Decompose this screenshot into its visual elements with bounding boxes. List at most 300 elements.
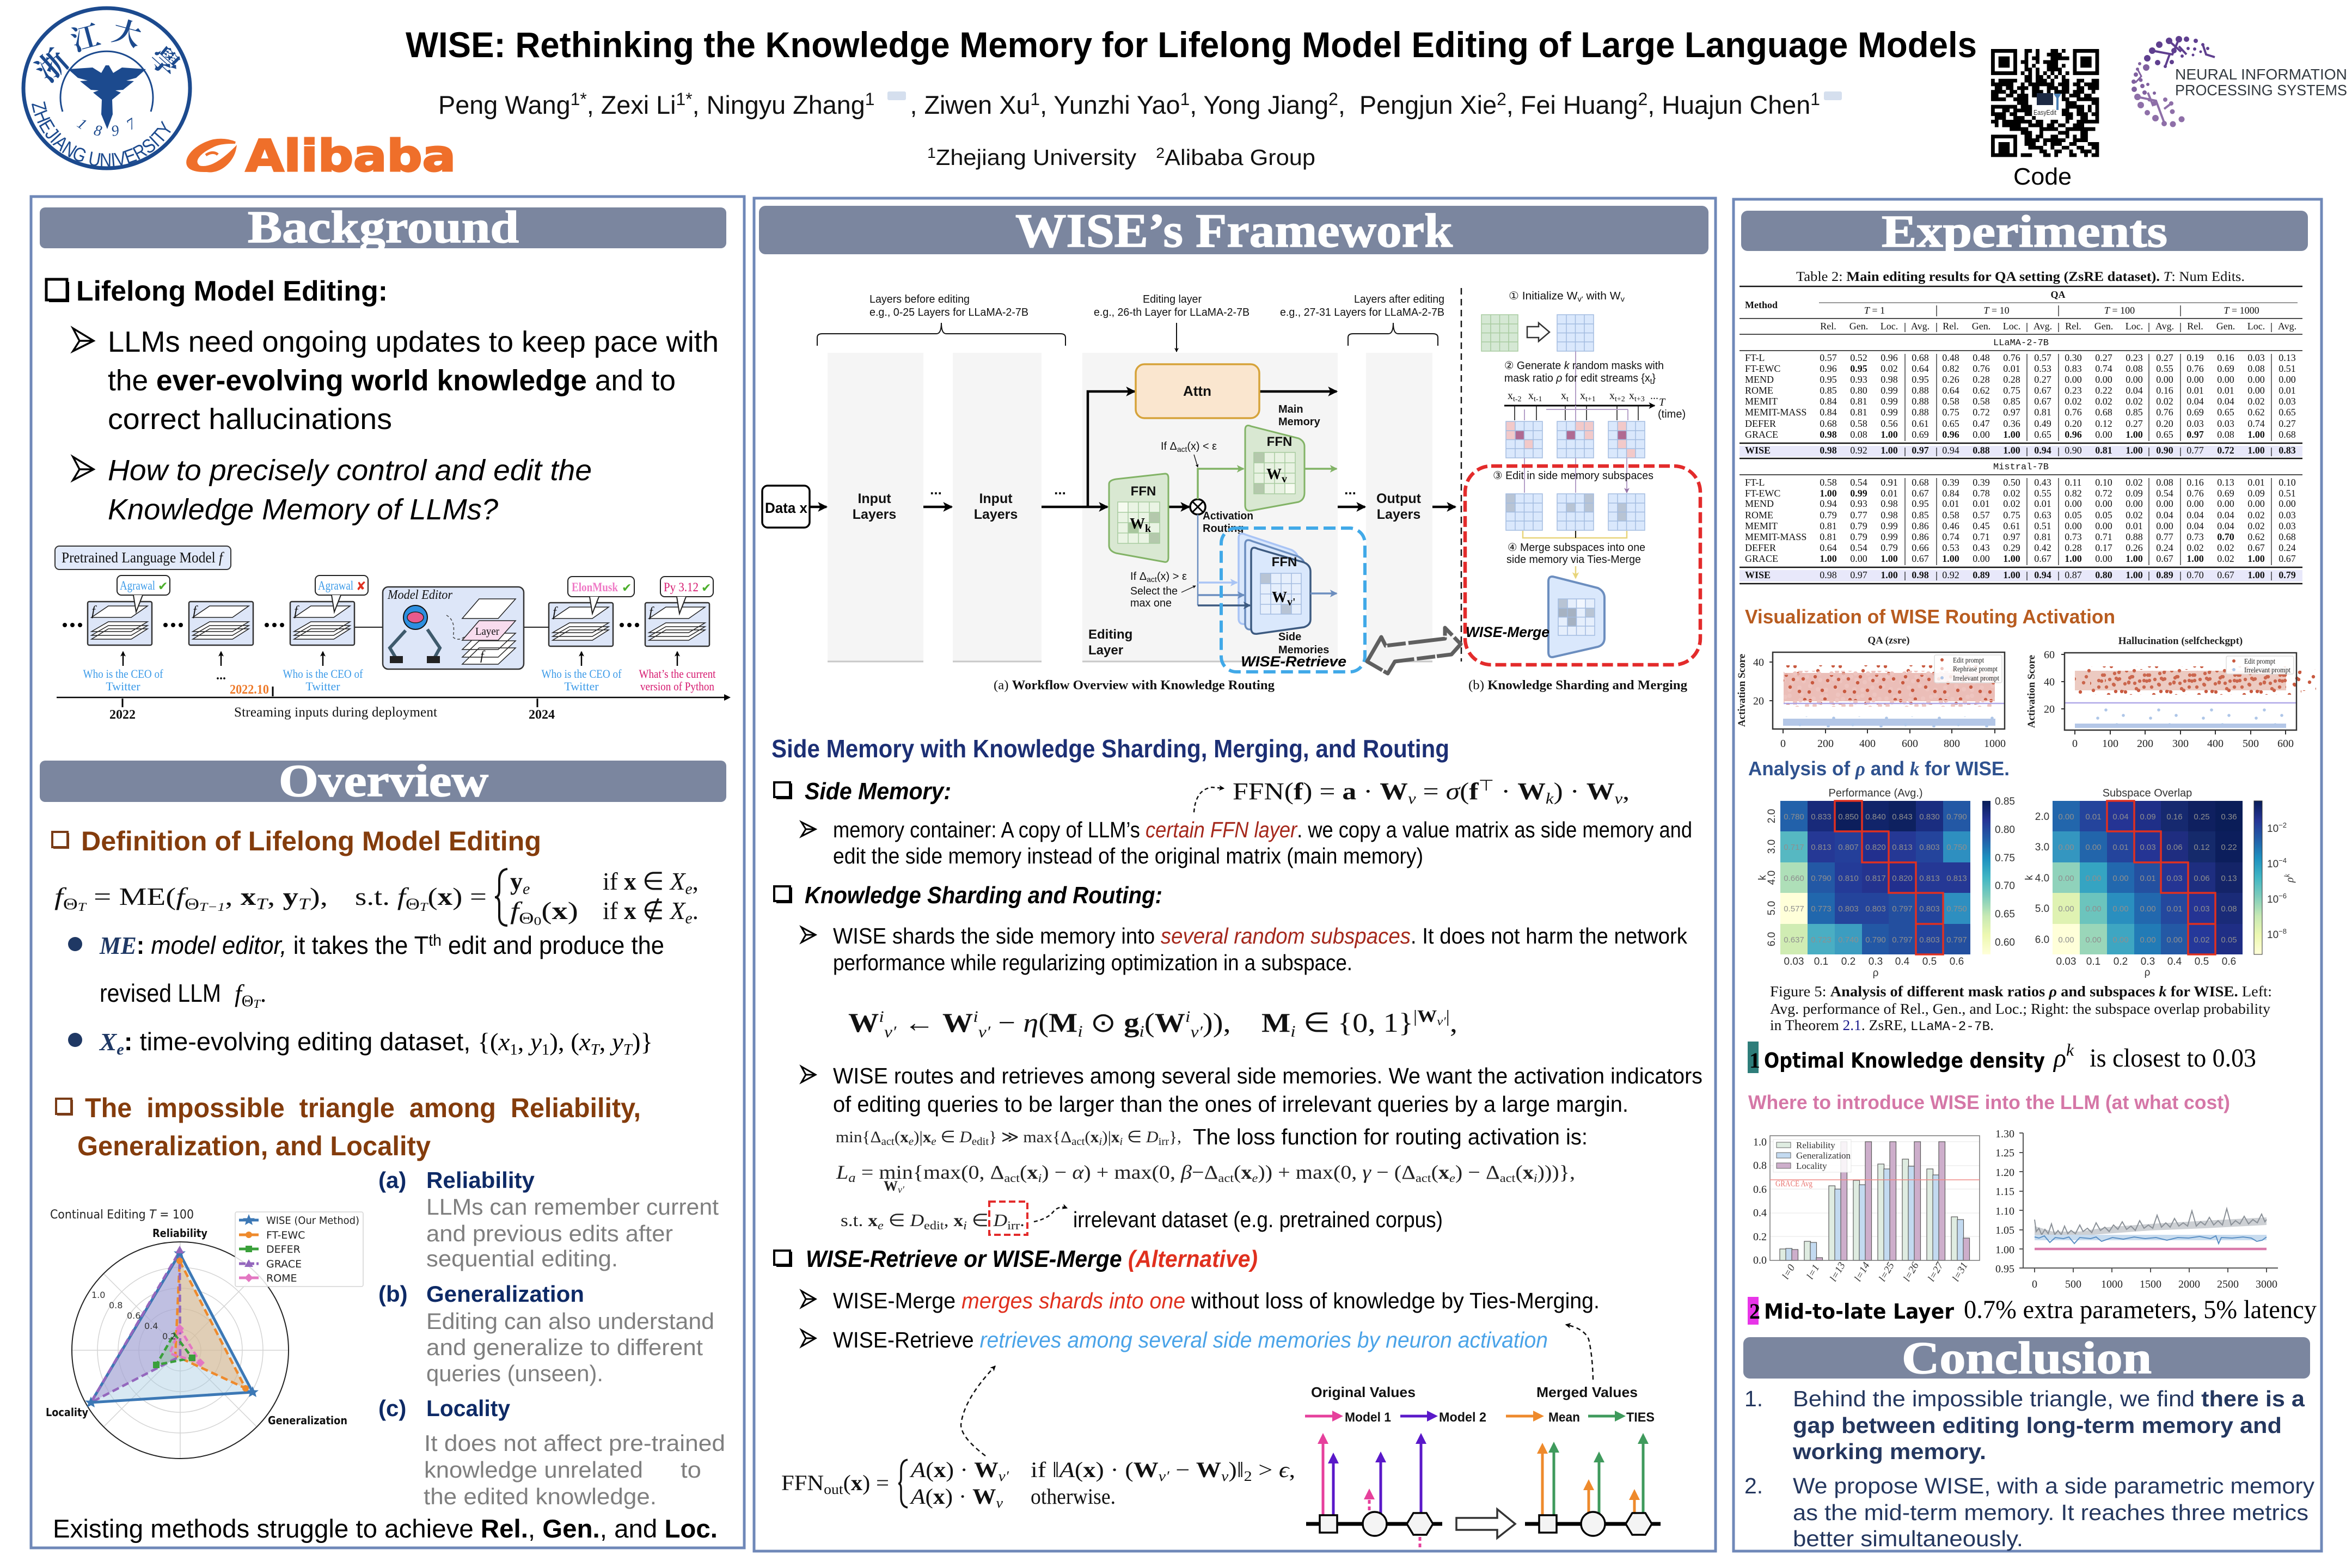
table: main editing results: Avg. [2278, 321, 2296, 332]
table: main editing results: 0.20 [2156, 418, 2173, 429]
table: main editing results: 0.02 [2247, 520, 2265, 531]
table: main editing results: 0.68 [2095, 407, 2112, 418]
table: main editing results: MEND [1745, 498, 1774, 509]
table: main editing results: 1.00 [2247, 569, 2265, 580]
diagram: workflow overview with knowledge routing: W [1266, 466, 1282, 483]
conclusion item 2: better simultaneously. [1793, 1526, 2023, 1551]
heatmap: performance: 0.773 [1811, 904, 1832, 914]
heatmap: subspace overlap: 0.00 [2085, 843, 2102, 852]
table: main editing results: 0.85 [2003, 396, 2020, 407]
bar chart: layer placement: Locality [1796, 1161, 1827, 1171]
table: main editing results: 1.00 [1820, 553, 1837, 564]
table: main editing results: 0.98 [1881, 374, 1898, 385]
authors: , Yunzhi Yao [1040, 90, 1180, 119]
line chart: latency: 1.20 [1995, 1167, 2014, 1179]
heatmap: performance: 0.797 [1946, 935, 1967, 945]
table: main editing results: 0.54 [1850, 542, 1867, 553]
table: main editing results: 0.97 [2003, 531, 2020, 542]
bar chart: layer placement: 0.8 [1753, 1160, 1767, 1172]
section: side memory: W [1517, 778, 1546, 805]
table: main editing results: 0.16 [2156, 385, 2173, 396]
formula: FFN output: 2 [1244, 1468, 1252, 1484]
table: main editing results: 0.97 [2003, 407, 2020, 418]
section: knowledge sharding and routing: i [1038, 1171, 1042, 1185]
table: main editing results: Mistral-7B [1993, 462, 2049, 473]
diagram: streaming model editing timeline: ✔ [158, 580, 168, 593]
bullet: dataset definition: , [518, 1028, 530, 1056]
diagram: knowledge sharding and merging: ③ Edit in side memory subspaces [1493, 470, 1653, 482]
table: main editing results: 0.81 [1850, 407, 1867, 418]
heading: Conclusion [1743, 1333, 2310, 1383]
formula: FFN output: W [1196, 1457, 1221, 1482]
table: main editing results: 0.00 [2278, 374, 2296, 385]
diagram: knowledge sharding and merging: side memory via Ties-Merge [1506, 554, 1641, 566]
scatter chart: hallucination: 300 [2172, 738, 2189, 750]
diagram: knowledge sharding and merging: x [1629, 390, 1634, 402]
section: knowledge sharding and routing: i [1185, 1008, 1190, 1026]
table: main editing results: 0.71 [1973, 531, 1990, 542]
diagram: streaming model editing timeline: Model Editor [387, 588, 453, 602]
line chart: latency: 1.10 [1995, 1205, 2014, 1217]
heatmap: subspace overlap: 0.3 [2141, 956, 2155, 967]
table: main editing results: MEMIT-MASS [1745, 531, 1806, 542]
table: main editing results: 0.96 [1820, 363, 1837, 374]
heatmap: subspace overlap: k [2024, 875, 2035, 880]
section: knowledge sharding and routing: a [848, 1171, 856, 1185]
diagram: workflow overview with knowledge routing: e.g., 0-25 Layers for LLaMA-2-7B [869, 307, 1028, 318]
table: main editing results: 1.00 [2126, 445, 2143, 456]
heading: Overview: Overview [279, 756, 488, 806]
table: main editing results: 0.82 [2065, 488, 2082, 499]
divider [1461, 288, 1462, 661]
diagram: workflow overview with knowledge routing: Layers after editing [1354, 293, 1444, 305]
section: knowledge sharding and routing: M [1261, 1007, 1290, 1038]
table: main editing results: 0.01 [2217, 385, 2234, 396]
table: main editing results: 0.27 [2278, 418, 2296, 429]
diagram: workflow overview with knowledge routing: e.g., 27-31 Layers for LLaMA-2-7B [1280, 307, 1444, 318]
table: main editing results: 0.95 [1912, 374, 1929, 385]
table: main editing results: 0.84 [1942, 488, 1959, 499]
line chart: latency: 2000 [2178, 1278, 2200, 1290]
table: main editing results: 0.98 [1881, 498, 1898, 509]
table: main editing results: 0.08 [1850, 429, 1867, 440]
diagram: knowledge sharding and merging: t+3 [1634, 395, 1645, 403]
bar chart: layer placement: Generalization [1796, 1150, 1851, 1161]
table: main editing results: 0.79 [1820, 510, 1837, 520]
section: side memory: σ(f [1446, 778, 1477, 805]
heatmap: performance: 5.0 [1766, 901, 1778, 915]
table: main editing results: 0.81 [1820, 520, 1837, 531]
diagram: ties merging: Model 2 [1439, 1410, 1486, 1425]
table: main editing results: 0.00 [2186, 498, 2204, 509]
section: knowledge sharding and routing: )) + max(0, [1258, 1161, 1362, 1183]
table: main editing results: 0.69 [2217, 488, 2234, 499]
formula: FFN output: > [1252, 1457, 1279, 1482]
radar chart: 0.8 [109, 1300, 122, 1310]
table: main editing results: MEMIT [1745, 520, 1778, 531]
text block: locality [378, 1395, 725, 1509]
heatmap: subspace overlap: −2 [2278, 821, 2287, 829]
table: main editing results: 0.98 [1820, 569, 1837, 580]
heatmap: subspace overlap: 0.00 [2112, 874, 2129, 883]
section: knowledge sharding and routing: ) − Δ [1455, 1161, 1500, 1183]
table: main editing results: 0.74 [2247, 418, 2265, 429]
table: main editing results: 0.65 [2217, 407, 2234, 418]
table: main editing results: 0.94 [1942, 445, 1959, 456]
table: main editing results: 0.11 [2065, 477, 2081, 488]
section: knowledge sharding and routing: act [1218, 1171, 1234, 1185]
conclusion item 2: as the mid-term memory. It reaches three metrics [1793, 1500, 2308, 1525]
heatmap: subspace overlap: 0.22 [2221, 843, 2237, 852]
table: main editing results: MEND [1745, 374, 1774, 385]
table: main editing results: 0.81 [1850, 396, 1867, 407]
table: main editing results: 1.00 [2247, 429, 2265, 440]
section: knowledge sharding and routing: v′ [1437, 1014, 1447, 1028]
diagram: workflow overview with knowledge routing: Editing layer [1143, 293, 1202, 305]
diagram: streaming model editing timeline: ElonMusk [572, 580, 618, 594]
formula: lifelong model editing: x [241, 883, 256, 910]
diagram: knowledge sharding and merging: t [1566, 395, 1569, 403]
authors: , Pengjun Xie [1338, 90, 1497, 119]
table: main editing results: 0.03 [2247, 352, 2265, 363]
table: main editing results: 0.80 [1850, 385, 1867, 396]
table: main editing results: 0.89 [2156, 569, 2173, 580]
logo: Zhejiang University seal: ZHEJIANG UNIVERSITY [32, 101, 171, 167]
bar chart: layer placement: l=13 [1828, 1260, 1848, 1284]
table: main editing results: 0.02 [2217, 553, 2234, 564]
table: main editing results: 0.30 [2065, 352, 2082, 363]
formula: lifelong model editing: y [510, 867, 523, 895]
diagram: knowledge sharding and merging: x [1609, 390, 1615, 402]
diagram: streaming model editing timeline: Twitter [106, 679, 140, 693]
diagram: workflow overview with knowledge routing: Select the [1130, 585, 1178, 597]
diagram: knowledge sharding and merging: x [1580, 390, 1585, 402]
bar chart: layer placement [1753, 1136, 1980, 1284]
text block: reliability [378, 1167, 719, 1271]
diagram: knowledge sharding and merging: v' [1577, 295, 1583, 303]
formula: FFN output: ( [843, 1471, 851, 1495]
conclusion item 1 [1744, 1386, 2305, 1464]
table: main editing results: Loc. [1881, 321, 1898, 332]
table: main editing results: MEMIT [1745, 396, 1778, 407]
table: main editing results: 0.54 [1850, 477, 1867, 488]
text block: LLM updates: the ever-evolving world knowledge and to [108, 364, 676, 397]
table: main editing results: 0.72 [2217, 445, 2234, 456]
formula: lifelong model editing: T [420, 900, 428, 914]
heatmap: performance: 0.577 [1784, 904, 1804, 914]
logo: Alibaba [187, 131, 456, 181]
diagram: workflow overview with knowledge routing: Data x [765, 500, 807, 516]
table: main editing results: 0.67 [2217, 569, 2234, 580]
bullet: dataset definition: x [579, 1028, 591, 1056]
section: WISE-Retrieve or WISE-Merge: WISE-Merge merges shards into one without loss of knowledge by Ties-Merging. [833, 1288, 1600, 1313]
section: knowledge sharding and routing: i [1099, 1136, 1102, 1148]
scatter chart: QA: 400 [1859, 738, 1876, 750]
section: knowledge sharding and routing: ∈ [884, 1210, 910, 1230]
table: main editing results: 0.05 [2095, 510, 2112, 520]
scatter chart: hallucination: 500 [2243, 738, 2259, 750]
table: main editing results: 0.98 [1820, 445, 1837, 456]
table: main editing results: 0.69 [1912, 429, 1929, 440]
logo: NeurIPS: PROCESSING SYSTEMS [2175, 82, 2347, 99]
diagram: ties merging: Original Values [1311, 1384, 1416, 1400]
section: knowledge sharding and routing: )| [1102, 1128, 1111, 1146]
heatmap: performance: 0.813 [1946, 874, 1967, 883]
diagram: workflow overview with knowledge routing: v [1282, 473, 1287, 485]
finding 1: is closest to 0.03 [2090, 1044, 2256, 1073]
diagram: streaming model editing timeline: f [294, 604, 299, 618]
table: main editing results: 0.00 [2095, 498, 2112, 509]
table: main editing results: 0.72 [1973, 407, 1990, 418]
authors: 1* [676, 89, 693, 109]
heatmap: performance: 0.1 [1814, 956, 1828, 967]
table: main editing results: 0.00 [2126, 374, 2143, 385]
table: main editing results: 0.02 [2065, 396, 2082, 407]
table: main editing results: 0.91 [1881, 477, 1898, 488]
bar chart: layer placement: l=31 [1950, 1260, 1970, 1284]
table: main editing results: 1.00 [2003, 553, 2020, 564]
section: knowledge sharding and routing: e [909, 1136, 914, 1148]
radar chart: Locality [46, 1406, 88, 1419]
heatmap: subspace overlap: 0.03 [2166, 874, 2183, 883]
bar chart: layer placement: 0.2 [1753, 1231, 1767, 1243]
diagram: streaming model editing timeline: Twitter [305, 679, 340, 693]
heatmap: subspace overlap: 6.0 [2035, 934, 2049, 946]
closing statement: Existing methods struggle to achieve Rel., Gen., and Loc. [53, 1514, 718, 1543]
diagram: knowledge sharding and merging: x [1528, 390, 1534, 402]
bullet: ME definition: f [235, 979, 245, 1007]
section: knowledge sharding and routing: ∈ [1123, 1128, 1146, 1146]
section: knowledge sharding and routing: x [1027, 1161, 1038, 1183]
heatmap: subspace overlap: 0.01 [2166, 904, 2183, 914]
line chart: latency [1995, 1128, 2278, 1290]
table: main editing results: 0.02 [2247, 396, 2265, 407]
section: knowledge sharding and routing: . [1020, 1210, 1025, 1230]
section: knowledge sharding and routing: v′ [1190, 1023, 1203, 1041]
bar chart: layer placement: 1.0 [1753, 1136, 1767, 1148]
heatmap: subspace overlap: 10 [2267, 894, 2278, 905]
formula: lifelong model editing: x) = [438, 883, 481, 910]
text block: reliability: and previous edits after [426, 1221, 673, 1246]
scatter chart: hallucination: 400 [2207, 738, 2224, 750]
diagram: knowledge sharding and merging: (time) [1658, 408, 1686, 420]
table: main editing results: 0.84 [1820, 407, 1837, 418]
section: knowledge sharding and routing: i [1119, 1136, 1123, 1148]
bar chart: layer placement: l=0 [1780, 1263, 1798, 1281]
section: knowledge sharding and routing: }, [1169, 1128, 1181, 1146]
table: main editing results: GRACE [1745, 429, 1778, 440]
table: main editing results: 0.93 [1850, 498, 1867, 509]
table: main editing results: 0.68 [2278, 531, 2296, 542]
heatmap: performance: 3.0 [1766, 840, 1778, 854]
table: main editing results: 1.00 [2003, 445, 2020, 456]
diagram: streaming model editing timeline: Layer [475, 626, 499, 638]
scatter chart: QA: 0 [1780, 738, 1786, 750]
bullet: dataset definition: , [599, 1028, 612, 1056]
table: main editing results: FT-L [1745, 352, 1765, 363]
bar chart: layer placement: 0.4 [1753, 1207, 1767, 1219]
section: knowledge sharding and routing: irr [1007, 1218, 1020, 1232]
text block: locality: Locality [426, 1395, 511, 1421]
section: side memory: FFN( f) = a · W [1233, 778, 1404, 805]
formula: FFN output: − [1169, 1457, 1196, 1482]
table: main editing results: 0.67 [2034, 396, 2051, 407]
heatmap: performance: 0.803 [1919, 904, 1940, 914]
table: main editing results: 0.03 [2186, 418, 2204, 429]
table: main editing results: 0.74 [2095, 363, 2112, 374]
heatmap: subspace overlap: 4.0 [2035, 873, 2049, 884]
table: main editing results: 0.39 [1973, 477, 1990, 488]
heatmap: subspace overlap: 0.08 [2221, 904, 2237, 914]
scatter chart: QA: 1000 [1984, 738, 2006, 750]
authors: 1 [1030, 89, 1040, 109]
table: main editing results: 0.75 [2003, 385, 2020, 396]
heatmap: subspace overlap: 0.00 [2058, 843, 2074, 852]
table: main editing results: Gen. [2094, 321, 2113, 332]
table: main editing results: 0.97 [2186, 429, 2204, 440]
formula: lifelong model editing: . [693, 897, 699, 924]
heading: visualization: Visualization of WISE Routing Activation [1745, 605, 2115, 628]
table: main editing results: 0.00 [2247, 385, 2265, 396]
QR code: EasyEdit [2033, 108, 2056, 117]
table: main editing results: 0.89 [1973, 569, 1990, 580]
table: main editing results: 0.99 [1850, 488, 1867, 499]
finding 2 [1748, 1295, 2317, 1325]
text block: generalization: Editing can also understand [426, 1308, 714, 1334]
table: main editing results: ROME [1745, 385, 1773, 396]
figure caption: in Theorem 2.1. ZsRE, LLaMA-2-7B. [1770, 1017, 1994, 1034]
table: main editing results: 0.01 [1942, 498, 1959, 509]
section: knowledge sharding and routing: x [1438, 1161, 1449, 1183]
heatmap: performance: Performance (Avg.) [1828, 787, 1923, 799]
radar chart: 0.2 [162, 1331, 176, 1342]
line chart: latency: 2500 [2217, 1278, 2239, 1290]
table: main editing results: 0.43 [1973, 542, 1990, 553]
heatmap: performance: 4.0 [1766, 871, 1778, 885]
diagram: workflow overview with knowledge routing: FFN [1272, 555, 1297, 569]
heatmap: performance: 0.813 [1811, 843, 1832, 852]
table: main editing results: 1.00 [2126, 429, 2143, 440]
section: knowledge sharding and routing: x [900, 1128, 909, 1146]
heading: Conclusion: Conclusion [1902, 1333, 2152, 1383]
table: main editing results: 0.01 [2003, 363, 2020, 374]
table: main editing results: 1.00 [1942, 553, 1959, 564]
table: main editing results: 1.00 [2126, 553, 2143, 564]
heatmap: subspace overlap: 0.1 [2086, 956, 2100, 967]
heatmap: performance: 0.70 [1995, 880, 2015, 892]
diagram: workflow overview with knowledge routing: Layers [1377, 507, 1420, 522]
heatmap: performance: 0.803 [1919, 843, 1940, 852]
formula: FFN output: )‖ [1228, 1457, 1244, 1482]
subheading: impossible triangle: Generalization, and Locality [77, 1131, 431, 1161]
logo: Zhejiang University seal: 大 [108, 8, 146, 54]
scatter chart: QA: Irrelevant prompt [1953, 675, 1999, 683]
table: main editing results: 0.58 [1850, 418, 1867, 429]
logo: Zhejiang University seal: 浙 [25, 38, 77, 91]
section: knowledge sharding and routing: | [1413, 1006, 1417, 1026]
formula: FFN output: ϵ, [1279, 1457, 1294, 1482]
table: main editing results: Gen. [2216, 321, 2235, 332]
formula: lifelong model editing: f [54, 883, 68, 910]
section: knowledge sharding and routing: min{Δ [836, 1128, 879, 1146]
formula: lifelong model editing: e [523, 880, 530, 898]
table: main editing results: 1.00 [1881, 553, 1898, 564]
bullet: dataset definition: e [117, 1040, 124, 1058]
table: main editing results: 0.88 [1912, 407, 1929, 418]
heatmap: subspace overlap: Subspace Overlap [2103, 787, 2192, 799]
table: main editing results: 0.02 [2156, 396, 2173, 407]
diagram: workflow overview with knowledge routing: ... [1054, 481, 1066, 498]
table: main editing results: 0.81 [2034, 531, 2051, 542]
formula: lifelong model editing: Θ [519, 909, 534, 927]
table: main editing results: 0.02 [2003, 488, 2020, 499]
diagram: workflow overview with knowledge routing: Layer [1088, 643, 1123, 658]
logo: Alibaba: Alibaba [246, 131, 456, 181]
heatmap: subspace overlap: 0.06 [2194, 874, 2210, 883]
table: main editing results: 0.00 [2095, 374, 2112, 385]
formula: lifelong model editing: , [267, 883, 283, 910]
text block: reliability: LLMs can remember current [426, 1194, 719, 1220]
section: knowledge sharding and routing: edit [924, 1218, 944, 1232]
table: main editing results: 0.00 [2095, 553, 2112, 564]
table: main editing results: 0.67 [2034, 385, 2051, 396]
logo: NeurIPS: NEURAL INFORMATION [2175, 66, 2347, 83]
formula: FFN output: out [824, 1481, 843, 1497]
bullet: ME definition: Θ [242, 992, 253, 1010]
table: main editing results: 0.66 [1912, 542, 1929, 553]
table: main editing results: 0.76 [2156, 407, 2173, 418]
table: main editing results: 0.77 [2156, 531, 2173, 542]
heading: Background [40, 202, 726, 253]
scatter chart: hallucination [2026, 635, 2316, 750]
heatmap: subspace overlap: 0.12 [2194, 843, 2210, 852]
table: main editing results: 0.88 [1912, 396, 1929, 407]
heatmap: subspace overlap: 0.04 [2112, 812, 2129, 822]
table: main editing results: 0.01 [2247, 477, 2265, 488]
heatmap: performance: 0.4 [1895, 956, 1910, 967]
scatter chart: hallucination: 20 [2044, 703, 2055, 715]
authors: Peng Wang [438, 90, 571, 119]
table: main editing results: 0.28 [2003, 374, 2020, 385]
heatmap: performance: 0.637 [1784, 935, 1804, 945]
diagram: workflow overview with knowledge routing: act [1177, 445, 1187, 454]
table: main editing results: 0.97 [1912, 445, 1929, 456]
heatmap: subspace overlap: 10 [2267, 823, 2278, 835]
heatmap: performance: 0.803 [1865, 904, 1886, 914]
table: main editing results: 1.00 [2186, 553, 2204, 564]
diagram: workflow overview with knowledge routing: Layers before editing [869, 293, 970, 305]
diagram: workflow overview with knowledge routing: Activation [1203, 510, 1253, 522]
heatmap: performance: 0.5 [1922, 956, 1937, 967]
table: main editing results: Rel. [1943, 321, 1959, 332]
heading: WISE's Framework: WISE’s Framework [1015, 205, 1453, 258]
heatmap: performance: 0.810 [1838, 874, 1859, 883]
section: knowledge sharding and routing: WISE shards the side memory into several random subspaces. It does not harm the network [833, 923, 1687, 948]
formula: lifelong model editing [54, 867, 699, 928]
section: side memory: v [1408, 791, 1416, 807]
table: main editing results: 0.75 [1942, 407, 1959, 418]
radar chart: DEFER [266, 1244, 301, 1255]
formula: lifelong model editing: ), [310, 883, 328, 910]
text block: LLM updates [73, 326, 719, 436]
heatmap: subspace overlap: 0.00 [2140, 935, 2156, 945]
table: main editing results: 0.96 [1881, 352, 1898, 363]
heatmap: performance: k [1757, 875, 1768, 880]
table: main editing results: 0.68 [2278, 429, 2296, 440]
heatmap: subspace overlap: ρ [2284, 877, 2296, 883]
section: knowledge sharding and routing: D [959, 1128, 972, 1146]
text block: reliability: (a) [378, 1167, 406, 1193]
